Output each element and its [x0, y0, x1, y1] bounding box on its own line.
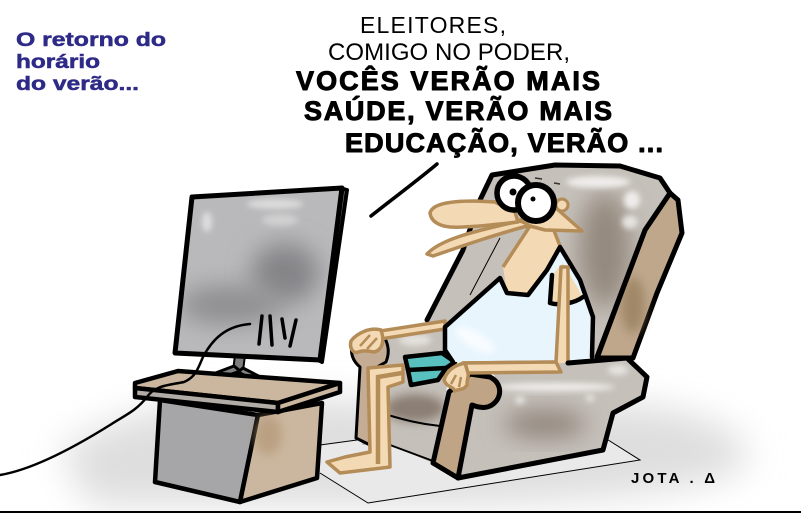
chair left side — [360, 330, 450, 463]
chair right armrest — [433, 358, 647, 478]
arm front panel — [433, 374, 500, 478]
left hand — [351, 329, 383, 352]
body outline — [445, 247, 593, 362]
cable — [0, 324, 250, 475]
tv marks — [259, 316, 296, 346]
chin — [520, 208, 582, 231]
lower beak — [427, 221, 531, 256]
neck — [503, 226, 560, 295]
armchair — [351, 165, 682, 463]
bottom border — [0, 511, 801, 513]
table — [135, 371, 340, 502]
floor shadow — [60, 399, 748, 505]
right forearm overlay — [463, 362, 561, 373]
title: horário — [16, 52, 100, 73]
chair side panel — [597, 193, 682, 358]
eyes — [497, 176, 554, 221]
title: do verão... — [16, 74, 139, 95]
tv stand — [205, 355, 268, 386]
eyebrows — [535, 178, 560, 184]
ear — [556, 199, 568, 211]
table lip side — [278, 383, 340, 412]
left upper arm — [380, 321, 445, 339]
right hand — [444, 363, 468, 391]
table body left — [155, 400, 258, 502]
rug — [320, 438, 640, 503]
speech text — [296, 12, 663, 158]
speech tail — [371, 164, 437, 216]
tv screen — [175, 188, 342, 360]
chair back — [427, 165, 670, 357]
upper beak — [430, 201, 518, 227]
table lip front — [135, 388, 278, 412]
title — [16, 30, 166, 95]
shoulder — [550, 263, 583, 304]
head — [427, 176, 582, 256]
title: O retorno do — [16, 30, 166, 51]
speech text: SAÚDE, VERÃO MAIS — [304, 95, 612, 126]
torso — [445, 247, 593, 362]
right arm — [463, 267, 568, 373]
table top — [135, 371, 340, 403]
table body right — [240, 403, 322, 502]
speech text: ELEITORES, — [360, 12, 506, 38]
speech text: VOCÊS VERÃO MAIS — [296, 65, 600, 96]
signature: JOTA . Δ — [631, 470, 715, 487]
tv side — [318, 188, 347, 362]
man — [327, 176, 593, 473]
shorts — [405, 353, 455, 385]
speech text: COMIGO NO PODER, — [328, 39, 570, 66]
speech text: EDUCAÇÃO, VERÃO ... — [345, 127, 663, 158]
legs — [327, 365, 403, 473]
left arm rest front — [351, 338, 388, 445]
television — [175, 188, 347, 386]
